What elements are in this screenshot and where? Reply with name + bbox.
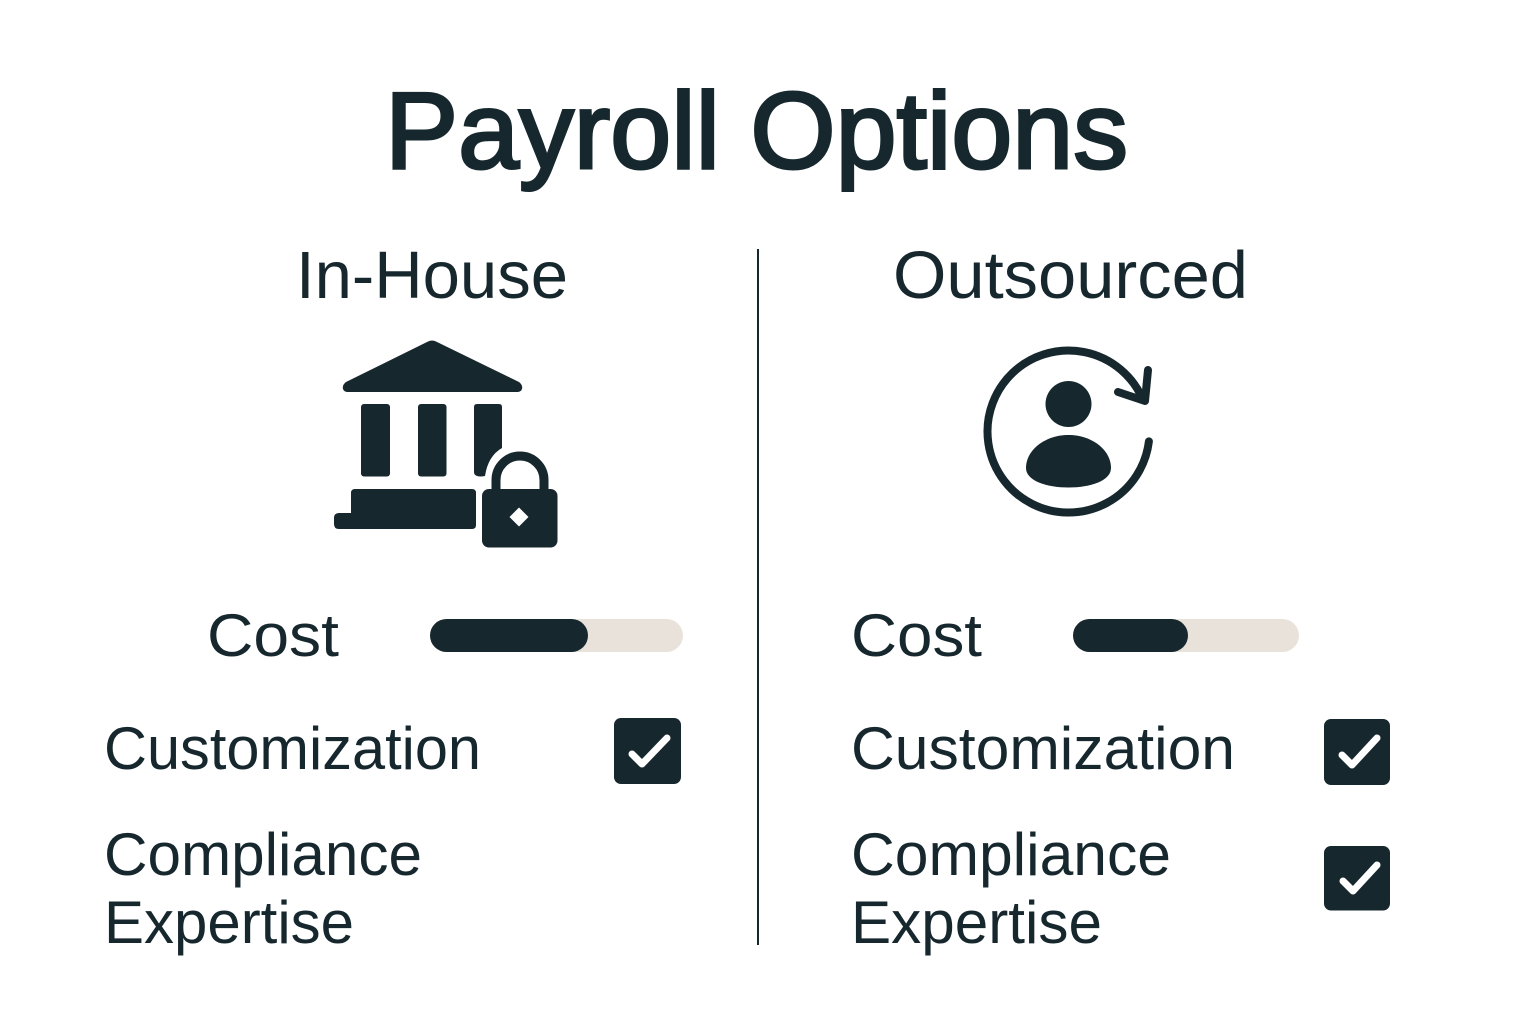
label: compliance expertise: Compliance (851, 821, 1171, 888)
label: compliance expertise: Compliance (104, 821, 422, 888)
icon: customization checkbox (614, 718, 681, 784)
center divider (757, 249, 759, 945)
label: compliance expertise: Expertise (851, 889, 1102, 956)
label: cost: Cost (851, 602, 982, 669)
label: compliance expertise (851, 821, 1171, 956)
icon: bank building with lock (334, 340, 558, 548)
label: compliance expertise (104, 821, 422, 956)
panel: outsourced (851, 238, 1390, 956)
label: cost: Cost (207, 602, 339, 669)
heading: outsourced: Outsourced (893, 238, 1248, 313)
label: compliance expertise: Expertise (104, 889, 354, 956)
cost bar (430, 619, 683, 652)
title: Payroll Options (385, 70, 1128, 192)
panel: in-house (104, 238, 683, 956)
icon: compliance checkbox (1324, 846, 1390, 910)
icon: person with circular arrow (988, 351, 1149, 513)
icon: customization checkbox (1324, 719, 1390, 785)
cost bar (1073, 619, 1299, 652)
label: customization: Customization (851, 715, 1235, 782)
label: customization: Customization (104, 715, 481, 782)
heading: in-house: In-House (296, 238, 568, 313)
